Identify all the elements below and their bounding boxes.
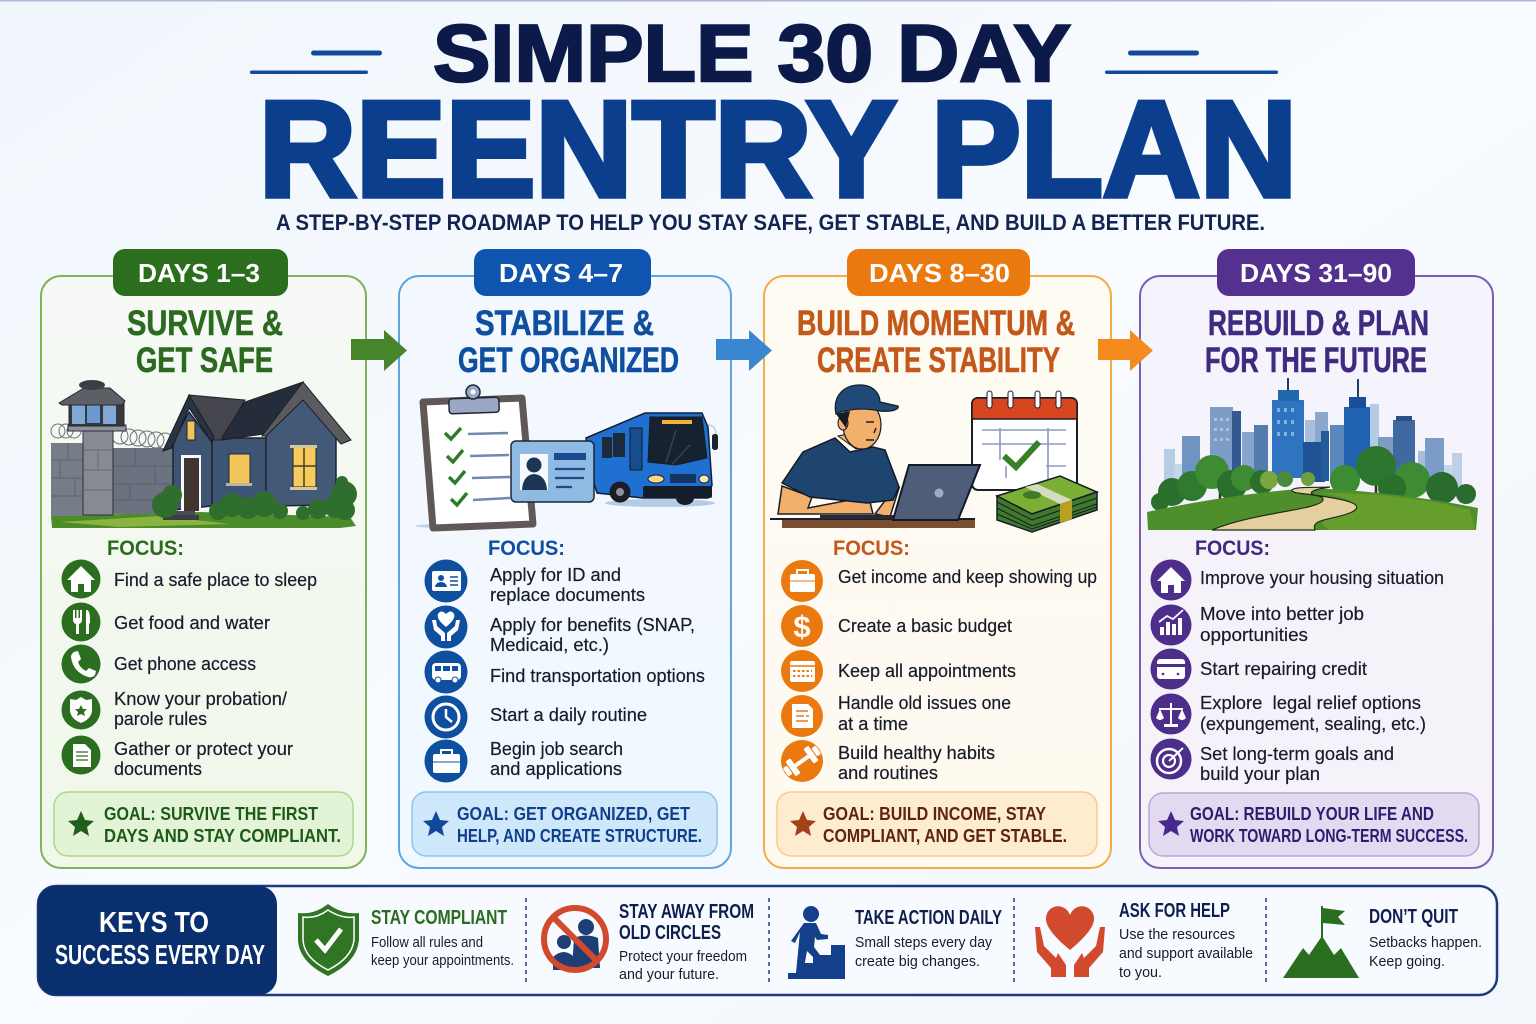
heading: build momentum and create stability: BUILD MOMENTUM & (797, 304, 1075, 343)
item: get phone access (62, 644, 256, 684)
key: stay compliant (298, 904, 514, 976)
item: apply for id: replace documents (490, 585, 645, 605)
key: stay compliant: Follow all rules and (371, 934, 483, 951)
key: don't quit: Setbacks happen. (1369, 934, 1482, 951)
item: gather documents: documents (114, 759, 202, 779)
goal: survive the first days: GOAL: SURVIVE THE FIRST (104, 803, 319, 824)
item: create a budget: $ (793, 609, 811, 644)
item: keep appointments: Keep all appointments (838, 661, 1016, 681)
item: create a budget: Create a basic budget (838, 616, 1012, 636)
goal: survive the first days (54, 792, 353, 856)
item: long-term goals (1150, 738, 1394, 784)
item: get food and water: Get food and water (114, 613, 270, 633)
panel: days 1-3 survive and get safe (41, 249, 366, 868)
item: legal relief: (expungement, sealing, etc.) (1200, 714, 1426, 734)
item: start a daily routine (424, 696, 647, 738)
item: build healthy habits: Build healthy habits (838, 743, 995, 763)
item: begin job search (424, 739, 623, 782)
illustration: city skyline and path (1147, 378, 1478, 530)
heading: keys to success every day (38, 886, 277, 995)
heading: stabilize and get organized: STABILIZE & (475, 304, 654, 343)
key: ask for help: and support available (1119, 945, 1253, 962)
item: improve housing (1150, 560, 1444, 600)
arrow: orange (1098, 330, 1153, 371)
list: focus items (62, 560, 317, 779)
item: repair credit (1150, 648, 1367, 690)
item: legal relief (1150, 693, 1426, 734)
goal: build income (777, 792, 1097, 856)
item: handle old issues (781, 693, 1011, 737)
icon: no people (544, 908, 606, 970)
heading: build momentum and create stability: CREATE STABILITY (817, 341, 1060, 380)
badge: days 4-7: DAYS 4–7 (499, 258, 623, 288)
panel: days 31-90 rebuild and plan for the future (1140, 249, 1493, 868)
item: find transportation: Find transportation options (490, 666, 705, 686)
key: don't quit: Keep going. (1369, 953, 1445, 970)
panel: keys to success strip (38, 886, 1497, 995)
key: take action daily (788, 906, 1002, 979)
heading: survive and get safe: GET SAFE (136, 341, 273, 380)
title: REENTRY PLAN (259, 73, 1297, 225)
title: SIMPLE 30 DAY (433, 9, 1071, 99)
goal: get organized (412, 792, 717, 856)
item: better job opportunities: Move into better job (1200, 604, 1364, 624)
key: stay compliant: keep your appointments. (371, 952, 514, 969)
badge: days 1-3: DAYS 1–3 (138, 258, 260, 288)
panel: days 8-30 build momentum and create stability (764, 249, 1111, 868)
item: get income (781, 560, 1097, 602)
key: ask for help: Use the resources (1119, 926, 1235, 943)
item: handle old issues: at a time (838, 714, 908, 734)
list: focus items (780, 560, 1097, 783)
item: find transportation (424, 650, 705, 694)
badge: days 1-3 (113, 249, 288, 296)
badge: days 31-90 (1217, 249, 1415, 296)
item: gather documents (62, 736, 293, 779)
item: build healthy habits (780, 740, 995, 783)
item: long-term goals: Set long-term goals and (1200, 744, 1394, 764)
key: stay away from old circles (544, 901, 754, 983)
goal: get organized: HELP, AND CREATE STRUCTURE. (457, 825, 702, 846)
subtitle: A STEP-BY-STEP ROADMAP TO HELP YOU STAY SAFE, GET STABLE, AND BUILD A BETTER FUTURE. (276, 210, 1265, 235)
icon: heart in hands (1035, 906, 1105, 977)
key: ask for help (1035, 900, 1253, 981)
badge: days 4-7 (474, 249, 651, 296)
key: stay away from old circles: STAY AWAY FROM (619, 901, 754, 923)
icon: climbing stairs (788, 906, 845, 979)
label: focus: FOCUS: (107, 537, 184, 560)
heading: survive and get safe: SURVIVE & (127, 304, 283, 343)
item: apply for benefits: Medicaid, etc.) (490, 635, 609, 655)
item: know probation and parole rules (62, 689, 287, 730)
item: long-term goals: build your plan (1200, 764, 1320, 784)
item: begin job search: Begin job search (490, 739, 623, 759)
item: start a daily routine: Start a daily routine (490, 705, 647, 725)
goal: build income: GOAL: BUILD INCOME, STAY (823, 803, 1047, 824)
heading: rebuild and plan for the future: FOR THE FUTURE (1205, 341, 1427, 380)
key: don't quit (1283, 906, 1482, 978)
key: ask for help: to you. (1119, 964, 1162, 981)
item: better job opportunities (1150, 604, 1364, 646)
label: focus: FOCUS: (833, 537, 910, 560)
item: better job opportunities: opportunities (1200, 625, 1308, 645)
item: apply for id (424, 560, 645, 605)
item: know probation and parole rules: Know your probation/ (114, 689, 287, 709)
arrow: blue (716, 330, 772, 371)
item: begin job search: and applications (490, 759, 622, 779)
item: improve housing: Improve your housing situation (1200, 568, 1444, 588)
key: stay away from old circles: OLD CIRCLES (619, 922, 721, 944)
goal: get organized: GOAL: GET ORGANIZED, GET (457, 803, 691, 824)
badge: days 31-90: DAYS 31–90 (1240, 258, 1392, 288)
item: keep appointments (781, 650, 1016, 692)
key: take action daily: create big changes. (855, 953, 980, 970)
goal: survive the first days: DAYS AND STAY COMPLIANT. (104, 825, 341, 846)
arrow: green (351, 330, 407, 371)
heading: rebuild and plan for the future: REBUILD & PLAN (1208, 304, 1429, 343)
key: don't quit: DON’T QUIT (1369, 906, 1458, 928)
icon: mountain flag (1283, 906, 1359, 978)
label: focus: FOCUS: (1195, 537, 1270, 560)
badge: days 8-30: DAYS 8–30 (869, 258, 1010, 288)
illustration: prison wall and house (51, 380, 357, 528)
item: legal relief: Explore legal relief options (1200, 693, 1421, 713)
heading: keys to success every day: SUCCESS EVERY DAY (55, 939, 265, 970)
key: stay compliant: STAY COMPLIANT (371, 907, 507, 929)
list: focus items (1150, 560, 1444, 784)
heading: build momentum and create stability (797, 304, 1075, 380)
goal: rebuild your life (1149, 793, 1479, 856)
key: ask for help: ASK FOR HELP (1119, 900, 1230, 922)
goal: rebuild your life: GOAL: REBUILD YOUR LIFE AND (1190, 803, 1434, 824)
heading: stabilize and get organized (458, 304, 679, 380)
item: get food and water (62, 602, 270, 642)
heading: survive and get safe (127, 304, 283, 380)
heading: keys to success every day: KEYS TO (99, 907, 209, 939)
item: get income: Get income and keep showing up (838, 567, 1097, 587)
item: gather documents: Gather or protect your (114, 739, 293, 759)
key: take action daily: TAKE ACTION DAILY (855, 907, 1002, 929)
item: apply for benefits: Apply for benefits (SNAP, (490, 615, 695, 635)
item: find a safe place to sleep (62, 560, 317, 598)
item: get phone access: Get phone access (114, 654, 256, 674)
icon: shield check (298, 904, 359, 976)
heading: rebuild and plan for the future (1205, 304, 1429, 380)
panel: days 4-7 stabilize and get organized (399, 249, 731, 868)
item: create a budget (781, 605, 1012, 647)
key: take action daily: Small steps every day (855, 934, 992, 951)
illustration: clipboard, id card and bus (415, 385, 718, 528)
key: stay away from old circles: and your future. (619, 966, 719, 983)
item: find a safe place to sleep: Find a safe place to sleep (114, 570, 317, 590)
heading: stabilize and get organized: GET ORGANIZED (458, 341, 679, 380)
key: stay away from old circles: Protect your freedom (619, 948, 747, 965)
item: repair credit: Start repairing credit (1200, 659, 1367, 679)
item: handle old issues: Handle old issues one (838, 693, 1011, 713)
label: focus: FOCUS: (488, 537, 565, 560)
badge: days 8-30 (847, 249, 1030, 296)
item: apply for benefits (424, 606, 695, 655)
item: know probation and parole rules: parole rules (114, 709, 207, 729)
goal: build income: COMPLIANT, AND GET STABLE. (823, 825, 1067, 846)
item: build healthy habits: and routines (838, 763, 938, 783)
item: apply for id: Apply for ID and (490, 565, 621, 585)
title (250, 9, 1297, 225)
illustration: person at laptop, calendar and money (770, 385, 1097, 532)
list: focus items (424, 560, 705, 782)
